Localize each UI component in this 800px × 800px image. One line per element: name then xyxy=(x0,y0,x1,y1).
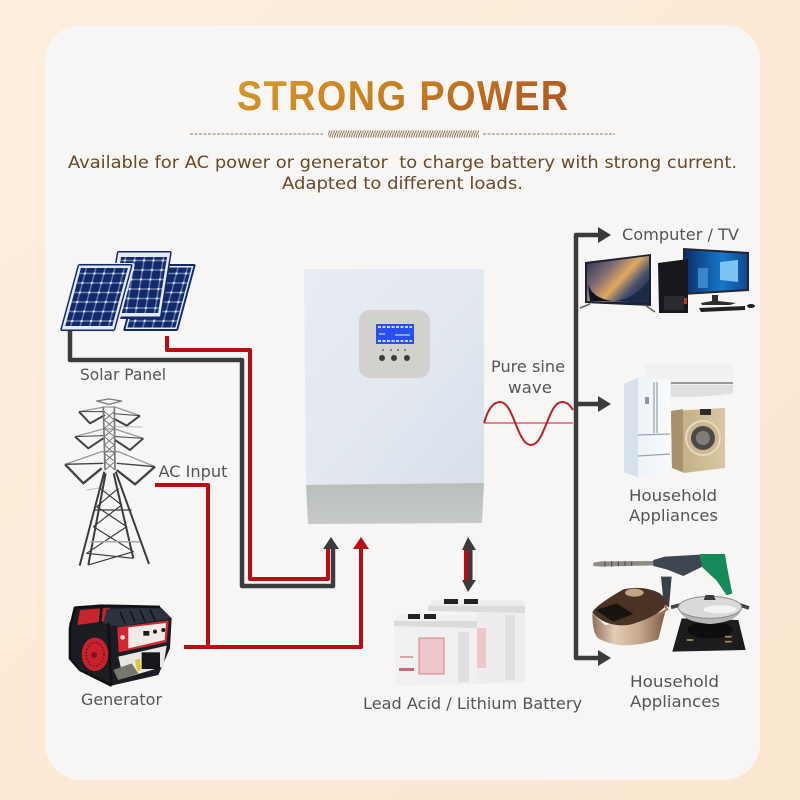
lid knob xyxy=(704,595,716,600)
generator frame tubes xyxy=(70,606,160,686)
wires: solar and AC input xyxy=(70,331,369,647)
pot body xyxy=(679,607,742,624)
label: household appliances upper: Household xyxy=(629,486,717,505)
cooker lid xyxy=(592,588,667,625)
cooker handle xyxy=(656,605,667,617)
icon: transmission tower xyxy=(65,399,155,566)
label: household appliances upper: Appliances xyxy=(629,506,718,525)
lid highlight xyxy=(703,605,737,613)
indicator lights xyxy=(383,349,405,351)
tower legs xyxy=(80,472,149,566)
drill bit thread xyxy=(605,561,632,567)
icon: rice cooker xyxy=(592,588,667,645)
label: pure sine wave xyxy=(491,357,565,397)
icon: television xyxy=(580,254,655,312)
keyboard and mouse xyxy=(699,304,755,312)
label: pure sine wave: wave xyxy=(508,378,552,397)
front solar panel xyxy=(59,263,135,332)
icon: generator xyxy=(69,605,172,686)
label: household appliances lower: Household xyxy=(630,672,719,691)
generator red wheel xyxy=(82,638,108,671)
tower upper arms xyxy=(79,407,140,426)
black arrowhead xyxy=(323,537,339,549)
stove knobs xyxy=(687,637,732,642)
subtitle text xyxy=(68,153,737,194)
red generator wire xyxy=(184,548,361,647)
icon: washing machine xyxy=(671,408,725,473)
drill bit xyxy=(593,561,655,567)
drill green housing xyxy=(700,554,732,595)
generator top cover xyxy=(103,608,171,627)
tower middle arms xyxy=(75,427,143,450)
arrow to appliances xyxy=(576,396,611,412)
red solar wire xyxy=(167,336,328,579)
battery double arrow xyxy=(462,537,476,592)
subtitle text: Adapted to different loads. xyxy=(282,174,523,194)
label: battery: Lead Acid / Lithium Battery xyxy=(363,694,582,713)
icon: solar panels xyxy=(59,251,196,332)
red arrowhead xyxy=(353,537,369,549)
label: household appliances upper xyxy=(629,486,718,525)
arrow to tools xyxy=(598,650,611,666)
label: household appliances lower xyxy=(630,672,720,711)
label: AC input: AC Input xyxy=(158,462,228,481)
tower top arm xyxy=(97,399,122,404)
subtitle text: Available for AC power or generator to charge battery with strong current. xyxy=(68,153,737,173)
monitor xyxy=(683,248,749,295)
icon: batteries xyxy=(394,599,525,686)
title: STRONG POWER xyxy=(237,73,568,119)
tower xyxy=(658,259,688,313)
right solar panel xyxy=(123,264,196,331)
inverter body xyxy=(304,269,484,486)
back solar panel xyxy=(106,251,172,319)
pot lid xyxy=(678,596,742,618)
arrow to computer xyxy=(598,227,611,243)
cooker base xyxy=(592,610,666,645)
generator tank xyxy=(77,608,110,625)
label: generator: Generator xyxy=(81,690,162,709)
control buttons xyxy=(379,355,410,361)
cooker lid knob xyxy=(625,589,644,597)
cooker display xyxy=(596,603,633,622)
LCD screen xyxy=(376,324,414,344)
icon: stove and pot xyxy=(671,595,749,652)
label: computer and TV: Computer / TV xyxy=(622,225,739,244)
sine wave xyxy=(484,402,573,445)
label: solar panel: Solar Panel xyxy=(80,365,166,384)
stove plate xyxy=(672,618,746,652)
generator engine bay xyxy=(113,646,167,680)
monitor stand xyxy=(701,295,736,305)
generator ridges xyxy=(120,610,155,623)
burner xyxy=(687,621,733,639)
output bus and arrows xyxy=(576,227,611,666)
inverter xyxy=(304,269,484,524)
inverter base xyxy=(306,483,484,524)
control panel xyxy=(359,310,430,378)
generator silhouette xyxy=(69,605,172,686)
output bus line xyxy=(576,235,598,658)
label: household appliances lower: Appliances xyxy=(630,692,720,711)
tower lattice mast xyxy=(103,407,115,470)
icon: hammer drill xyxy=(593,554,732,607)
generator control panel xyxy=(117,620,169,652)
label: pure sine wave: Pure sine xyxy=(491,357,565,376)
front battery xyxy=(394,614,477,686)
red AC input wire xyxy=(155,485,208,647)
drill body xyxy=(653,555,702,576)
icon: desktop computer xyxy=(658,248,755,313)
icon: refrigerator xyxy=(624,377,670,478)
drill side handle xyxy=(661,577,672,607)
icon: air conditioner xyxy=(645,364,733,397)
tower lower arms xyxy=(65,452,155,490)
pot handles xyxy=(671,605,749,608)
back battery xyxy=(428,599,525,684)
black solar wire xyxy=(70,331,333,586)
divider ornament xyxy=(190,130,615,138)
